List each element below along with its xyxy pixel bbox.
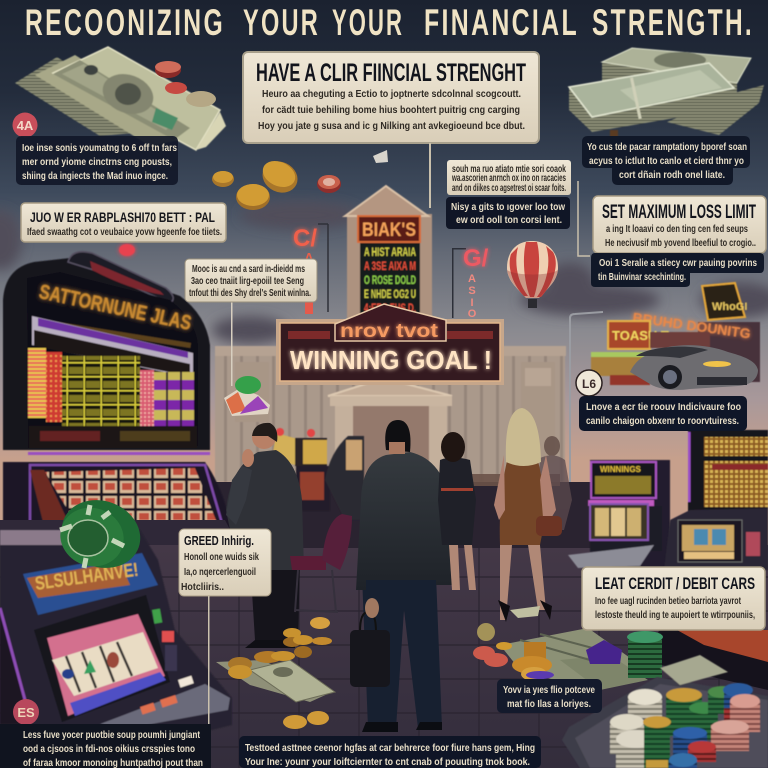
hot air balloon [507, 241, 558, 308]
callout: greed [179, 529, 271, 596]
arm to face [226, 466, 252, 525]
distant neon buildings: TOASU.T [612, 328, 669, 343]
callout: center left note: 3ao ceo tnaiit lirg-epoiil tee Seng [191, 276, 304, 287]
second slot machine: SLSULHANVE! [34, 560, 140, 595]
title [25, 2, 754, 43]
second slot machine [0, 530, 232, 768]
main slot machine [3, 244, 234, 540]
legs [250, 560, 300, 640]
connector line from top panel [429, 143, 431, 208]
yellow grid paytable [62, 356, 140, 426]
console [3, 462, 234, 540]
dark note: loss limit [591, 253, 764, 287]
marquee text: SATTORNUNE JLAS [37, 280, 193, 335]
central man from behind [350, 420, 453, 732]
number badge B6 [576, 370, 602, 396]
chairs [290, 514, 352, 612]
dark note: floor chips: Yovv ia yıes flio potceve [503, 685, 595, 696]
man at machine [226, 423, 304, 648]
top left money stack [15, 47, 226, 150]
button tray [70, 672, 166, 716]
connector line below greed [208, 596, 210, 768]
table mat and frame under panel [640, 630, 768, 690]
casino building: A HIST ARAIA [364, 245, 416, 259]
cabinet [0, 530, 232, 768]
dark note: floor chips: mat fio Ilas a loriyes. [507, 699, 591, 710]
clouds [0, 201, 768, 344]
casino building [215, 186, 566, 482]
dark note: bottom left: Less fuve yocer puotbie soup poumhi jungiant [23, 730, 201, 741]
dark note: top right [582, 136, 750, 185]
dark note: loss limit: tin Buinvinar scechinting. [598, 272, 686, 283]
panel: have a clear financial strength: Hoy you jate g susa and ic g Nilking ant avkegioeund bce dbut. [258, 121, 525, 132]
callout: center left note: Mooc is au cnd a sard in-dieidd ms [192, 264, 305, 275]
bill stack [660, 655, 728, 685]
panel: leave credit debit cards [582, 567, 765, 630]
top right money stack [569, 48, 764, 138]
panel: have a clear financial strength [243, 52, 539, 143]
red and yellow paytable column [28, 348, 46, 418]
background machines [272, 428, 364, 520]
number badge 4A [12, 112, 38, 138]
number badge 4A: 4A [17, 118, 34, 133]
portico [328, 378, 452, 396]
title: YOUR [243, 2, 320, 43]
head [385, 420, 410, 452]
left floor coins and bills [216, 617, 335, 729]
title: YOUR [332, 2, 404, 43]
back wall band [215, 482, 615, 548]
jacket [356, 452, 453, 590]
casino building: O ROSE DOLD [364, 273, 416, 287]
title: RECOONIZING [25, 2, 225, 43]
distant neon buildings: BRUHD DOUNITG [632, 309, 752, 342]
sports car [630, 345, 758, 390]
shoes [362, 722, 398, 732]
side indicators [152, 609, 162, 624]
top lamp cap [68, 252, 173, 303]
connector bracket [578, 181, 590, 256]
casino building: BIAK'S [362, 220, 416, 241]
head [252, 425, 276, 449]
reels [52, 632, 158, 696]
chip stacks [628, 696, 662, 718]
green poker chip [52, 489, 150, 579]
top left chips and coin [155, 61, 216, 107]
woman in dark dress [438, 432, 476, 590]
number badge ES: ES [17, 705, 35, 720]
dark note: center [446, 197, 570, 229]
pink column [140, 370, 154, 428]
floor [0, 545, 768, 768]
jacket [226, 450, 304, 570]
icon: small money sticker [224, 376, 270, 416]
screen [27, 272, 198, 448]
console deck [100, 684, 230, 728]
panel: budget tip: Ifaed swaathg cot o veubaice yovw hgeenfe foe tiiets. [27, 227, 222, 238]
right back slot machine [568, 460, 670, 570]
neon casino sign right: O [468, 308, 477, 320]
dark note: top left: shiing da ingiects the Mad inuo ingce. [22, 171, 168, 182]
lower strip [29, 426, 197, 448]
panel: small center note: souh ma ruo atiato mtie sori coaok [452, 164, 566, 175]
distant neon buildings [591, 283, 760, 385]
briefcase [360, 612, 376, 632]
dark note: top right: cort dñain rodh onel liate. [619, 170, 725, 181]
neon casino sign right: G/ [463, 245, 489, 272]
main neon sign: winning goal: WINNING GOAL ! [290, 345, 492, 375]
chip tray [562, 655, 768, 768]
neon casino sign right: A [468, 273, 476, 285]
dark note: top left: mer ornd yiome cinctrns cng pousts, [22, 157, 172, 168]
casino building: E NHDE OG2 U [364, 287, 416, 301]
dark note: center: ew ord ooll ton corsi lent. [456, 215, 562, 226]
dark note: center: Nisy a gits to ıgover loo tow [451, 202, 565, 213]
street lamp [570, 312, 603, 500]
number badge B6: L6 [582, 377, 596, 391]
panel: small center note: and on diikes co agsetrest oi scaar foits. [452, 183, 566, 194]
flag on tower [373, 150, 388, 163]
neon casino sign right: I [470, 297, 474, 309]
main neon sign: winning goal: nrov tvot [340, 321, 439, 342]
dark note: bottom center: Your Ine: younr your Ioiftciernter to cnt cnab of pouuting tnok book. [245, 757, 530, 768]
callout: greed: GREED Inhirig. [184, 533, 254, 548]
marquee screen [23, 553, 158, 615]
purple and yellow paytable [154, 372, 194, 432]
panel: have a clear financial strength: Heuro aa cheguting a Ectio to joptnerte sdcolnnal scogcoutt. [262, 89, 521, 100]
right back slot machine: WINNINGS [600, 465, 642, 474]
dark note: bottom left [0, 724, 211, 768]
casino building: 4:ERS FHS D. [364, 301, 416, 315]
neon casino sign right: S [468, 285, 476, 297]
button deck [45, 468, 218, 530]
title: FINANCIAL [424, 2, 579, 43]
callout: center left note: tnfout thi des Shy drel's Senit winlna. [189, 288, 311, 299]
tower odds board [360, 243, 420, 317]
man in background [538, 436, 572, 530]
neon casino sign right [452, 245, 489, 320]
neon casino sign left: C/ [293, 225, 317, 252]
right floor money and coins [473, 606, 663, 690]
callout: greed: Honoll one wuids sik [184, 552, 259, 563]
neon casino sign left: A [304, 250, 314, 265]
panel: have a clear financial strength: HAVE A CLIR FIINCIAL STRENGHT [256, 59, 526, 87]
callout: center left note [185, 259, 317, 386]
white paytable strip [32, 316, 193, 378]
dark note: floor chips [497, 679, 602, 713]
tower name sign [358, 216, 420, 242]
dark note: car [579, 396, 747, 431]
distant neon buildings: WhoGI [712, 301, 747, 313]
shoes right [416, 722, 442, 730]
dark note: bottom left: ood a cjsoos in fdi-nos oikius crsspies tono [23, 744, 195, 755]
dark note: top left: Ioe inse sonis youmatng to 6 off tn fars [22, 143, 177, 154]
panel: small center note [447, 160, 571, 195]
panel: set maximum loss limit [593, 196, 766, 253]
dark note: car: canilo chaigon obxenr to roorvtuiress. [586, 416, 739, 427]
decorative fence [470, 474, 560, 486]
wings and facade [215, 352, 565, 482]
cabinet [3, 258, 210, 450]
panel: have a clear financial strength: for cädt tuie behiling bome hius boohtert puitrig cng carging [262, 105, 520, 116]
callout: greed: Ia,o nqercerlenguoil [184, 567, 256, 578]
main neon sign: winning goal [276, 304, 504, 385]
panel: small center note: wa.ascorien anrnch ox ino on racacies [451, 173, 566, 184]
right front slot machine [664, 430, 768, 570]
central tower with pediment [347, 214, 432, 334]
casino building: A 3SE AIXA M [364, 259, 416, 273]
left pedestal base [0, 520, 238, 545]
number badge ES [13, 699, 39, 725]
neon casino sign left [293, 224, 328, 314]
dark note: bottom center: Testtoed asttnee ceenor hgfas at car behrerce foor fiure hans gem, Hing [245, 743, 535, 754]
dark note: top left [16, 136, 178, 185]
callout: greed: Hotcliiris.. [181, 582, 224, 593]
dark note: car: Lnove a ecr tie roouv Indicivaure foo [586, 402, 741, 413]
blonde woman [494, 408, 562, 622]
screen frame [34, 595, 170, 722]
panel: budget tip: JUO W ER RABPLASHI70 BETT : PAL [30, 209, 215, 225]
panel: budget tip [21, 203, 226, 242]
flying coins and chip [212, 156, 341, 210]
trousers [362, 575, 442, 728]
dark note: bottom center [239, 736, 541, 768]
